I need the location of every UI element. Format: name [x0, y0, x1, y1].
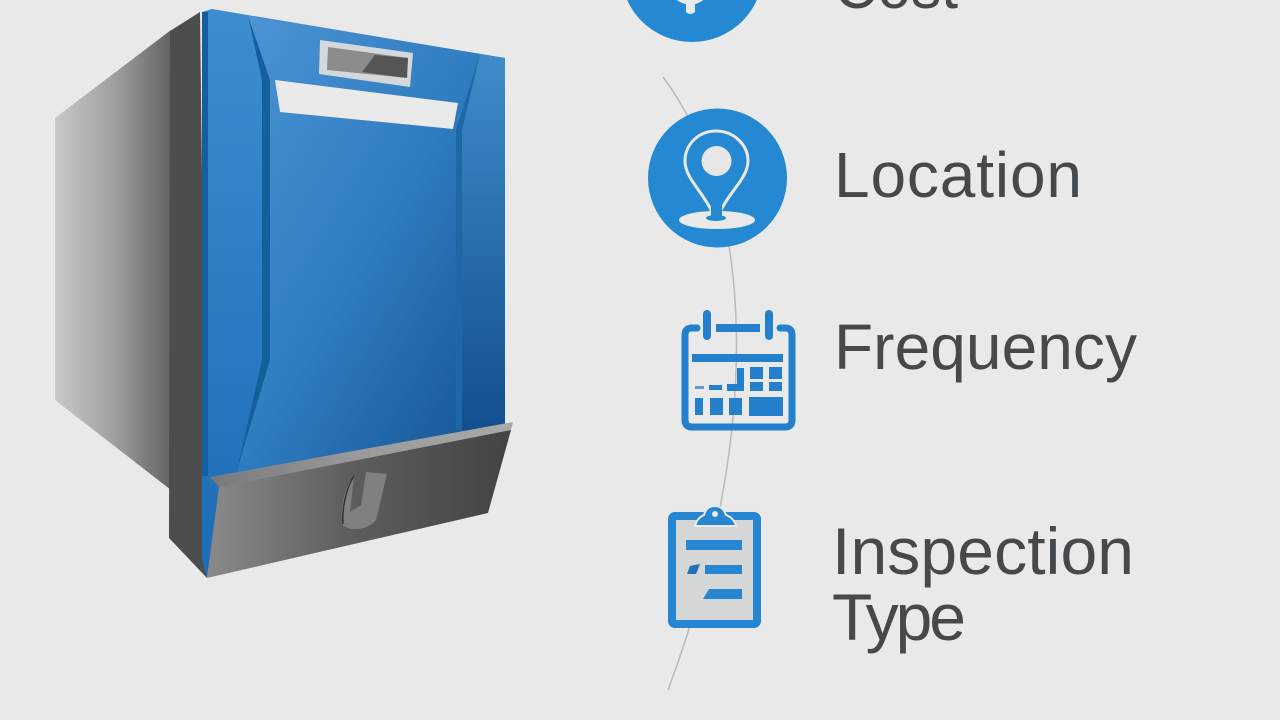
display window [319, 40, 413, 87]
label: inspection type: Type [832, 580, 966, 654]
drawer lip [210, 422, 513, 487]
cabinet blue front [202, 9, 505, 578]
main door panel [237, 16, 505, 472]
drawer handle [342, 472, 387, 529]
cabinet side panel [55, 30, 171, 490]
icon: cost circle [621, 0, 763, 42]
label: location: Location [834, 139, 1082, 211]
label: inspection type: Inspection [832, 514, 1134, 588]
cabinet illustration [55, 9, 513, 578]
cabinet front edge [169, 12, 207, 578]
label: inspection type [832, 514, 1134, 654]
right door strip [462, 54, 505, 432]
drawer front [207, 430, 511, 578]
icon: clipboard [672, 506, 757, 624]
connecting arc [663, 77, 736, 690]
label: frequency: Frequency [834, 311, 1137, 383]
white label plate [275, 80, 458, 129]
door fold wedges [202, 12, 480, 476]
icon: calendar [685, 310, 792, 427]
icon: location pin [648, 108, 787, 248]
